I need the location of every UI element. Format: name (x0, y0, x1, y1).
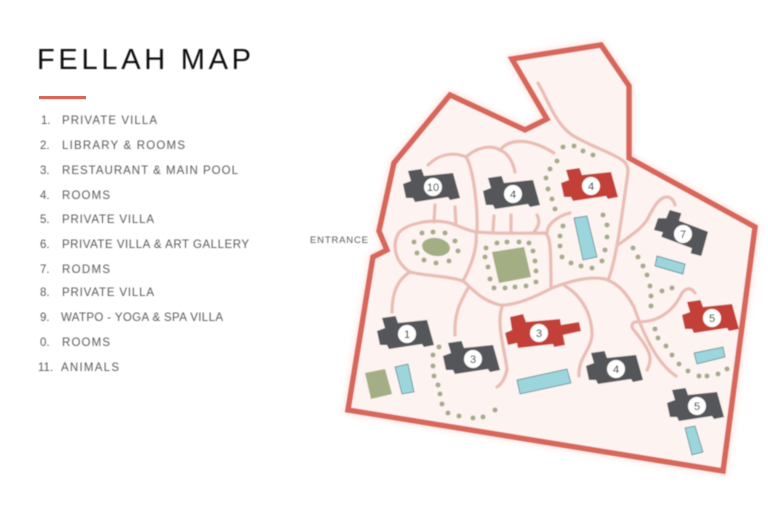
item 1: PRIVATE VILLA (62, 115, 157, 127)
building 7 (654, 210, 708, 256)
dots lower right trail (652, 326, 730, 378)
legend list (38, 115, 249, 374)
dots around square lawn (482, 240, 538, 290)
item 10: 0. (40, 337, 50, 349)
item 9: WATPO - YOGA & SPA VILLA (61, 312, 223, 324)
dots lower left trail (430, 344, 498, 420)
pools (395, 216, 725, 455)
item 4: 4. (40, 190, 50, 202)
pool: near red 5 (694, 347, 725, 364)
lawn: lower left (365, 369, 392, 399)
building 5 lower (667, 388, 724, 421)
item 8: 8. (40, 287, 50, 299)
item 6: PRIVATE VILLA & ART GALLERY (62, 239, 249, 251)
item 4: ROOMS (62, 190, 110, 202)
lawn: oval (421, 236, 451, 258)
pool: central (574, 216, 597, 260)
building 4 grey: 4 (510, 189, 516, 201)
entrance label: ENTRANCE (310, 235, 368, 246)
building 4 red (561, 168, 618, 201)
item 7: 7. (40, 264, 50, 276)
building 4 grey (483, 176, 540, 209)
building 3 red (505, 314, 581, 348)
item 3: 3. (40, 165, 50, 177)
pool: lower left (395, 364, 414, 394)
building 1: 1 (404, 329, 410, 341)
dots around pool (558, 212, 610, 270)
dots around oval lawn (412, 230, 460, 266)
building 1 (377, 316, 434, 349)
item 6: 6. (40, 239, 50, 251)
building 3 red: 3 (536, 328, 542, 340)
item 7: RODMS (62, 264, 110, 276)
building 10: 10 (427, 182, 439, 194)
item 5: PRIVATE VILLA (62, 214, 154, 226)
building 10 (403, 169, 460, 202)
pool: near 7 (655, 256, 685, 274)
item 11: 11. (38, 362, 53, 374)
item 2: 2. (40, 140, 50, 152)
item 5: 5. (40, 214, 50, 226)
item 10: ROOMS (62, 337, 110, 349)
pool: long (517, 369, 571, 394)
building 4 lower: 4 (613, 364, 619, 376)
building 4 red: 4 (588, 181, 594, 193)
building 5 red (682, 300, 739, 333)
item 11: ANIMALS (61, 362, 119, 374)
item 1: 1. (41, 115, 51, 127)
building 5 red: 5 (709, 313, 715, 325)
dots right trail (630, 246, 674, 308)
boundary glow (348, 45, 755, 471)
item 3: RESTAURANT & MAIN POOL (62, 165, 239, 177)
building 4 lower (586, 351, 643, 384)
lawn: square (492, 247, 531, 283)
building 3 grey: 3 (470, 354, 476, 366)
dots around red building (544, 144, 596, 212)
building 3 grey (443, 341, 500, 374)
item 2: LIBRARY & ROOMS (62, 140, 185, 152)
item 10 (40, 337, 110, 349)
title: FELLAH MAP (37, 44, 251, 76)
pool: lower right (685, 426, 703, 455)
building 7: 7 (680, 229, 686, 241)
map site (348, 45, 755, 471)
shrub dots (412, 144, 730, 420)
site boundary (348, 45, 755, 471)
item 7 (40, 264, 110, 276)
footpaths (392, 83, 695, 387)
item 4 (40, 190, 110, 202)
item 8: PRIVATE VILLA (62, 287, 154, 299)
building 5 lower: 5 (694, 401, 700, 413)
item 9: 9. (40, 312, 50, 324)
title underline (39, 96, 86, 99)
